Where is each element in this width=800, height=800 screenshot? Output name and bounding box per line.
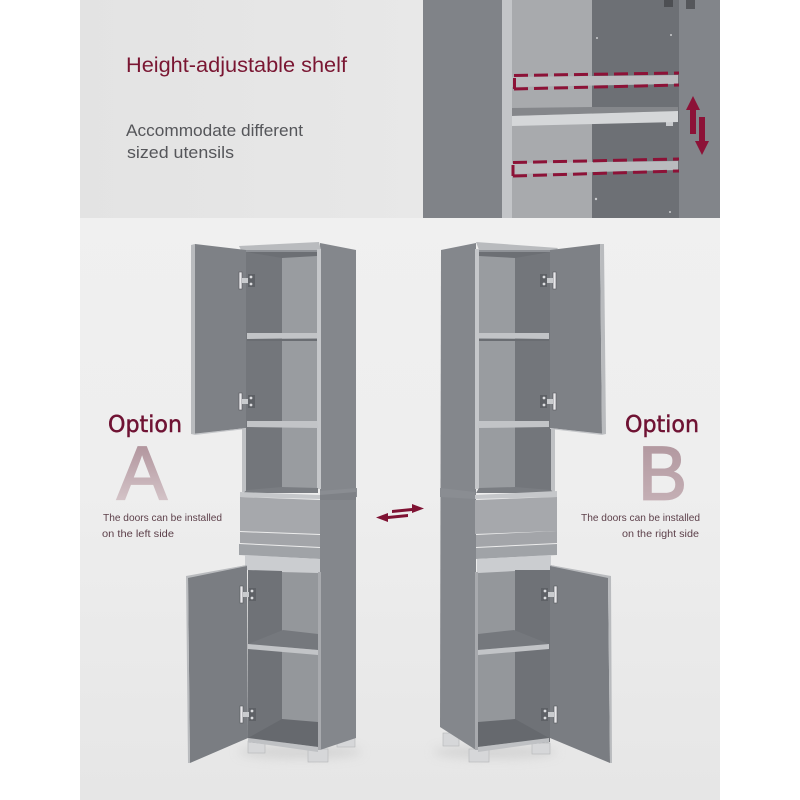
label: option B: Option [625,410,699,438]
drawers [440,488,475,499]
shelves [479,333,549,339]
hinges [540,272,556,289]
caption: option B: on the right side [622,529,699,540]
side panel [320,243,356,750]
lower door [550,565,610,763]
letter A: A [117,432,167,516]
text block: shelf description: sized utensils [127,144,234,162]
lower door [188,565,248,763]
dashed marker: lower shelf position [513,159,679,176]
panel: height-adjustable shelf [80,0,720,218]
feet [443,733,550,762]
lower compartment [248,570,282,746]
lower shelf [248,630,318,650]
caption: option B [581,513,700,540]
label: option A [102,410,222,540]
upper door [550,244,602,434]
icon: swap arrows [376,504,424,522]
caption: option A [102,513,222,540]
upper door [195,244,246,434]
caption: option B: The doors can be installed [581,513,700,524]
upper compartment [478,250,554,492]
dashed marker: upper shelf position [514,73,679,89]
hinges [239,272,255,289]
cabinet: option A [186,242,357,763]
caption: option A: on the left side [102,529,174,540]
feet [248,737,355,762]
upper compartment [243,250,318,492]
shadow under cabinets [238,745,557,759]
side panel [440,243,476,750]
heading: height-adjustable shelf: Height-adjustable shelf [126,54,347,77]
text block: shelf description [126,122,303,162]
text block: shelf description: Accommodate different [126,122,303,140]
letter B: B [638,432,687,516]
photo: shelf close-up [423,0,720,218]
drawers [320,488,357,499]
cabinet: option B [440,242,612,763]
icon: up and down arrows [686,96,709,155]
shelves [247,333,317,339]
lower compartment [478,571,515,751]
caption: option A: The doors can be installed [103,513,222,524]
lower shelf [478,630,549,650]
label: option B [581,410,700,540]
label: option A: Option [108,410,182,438]
